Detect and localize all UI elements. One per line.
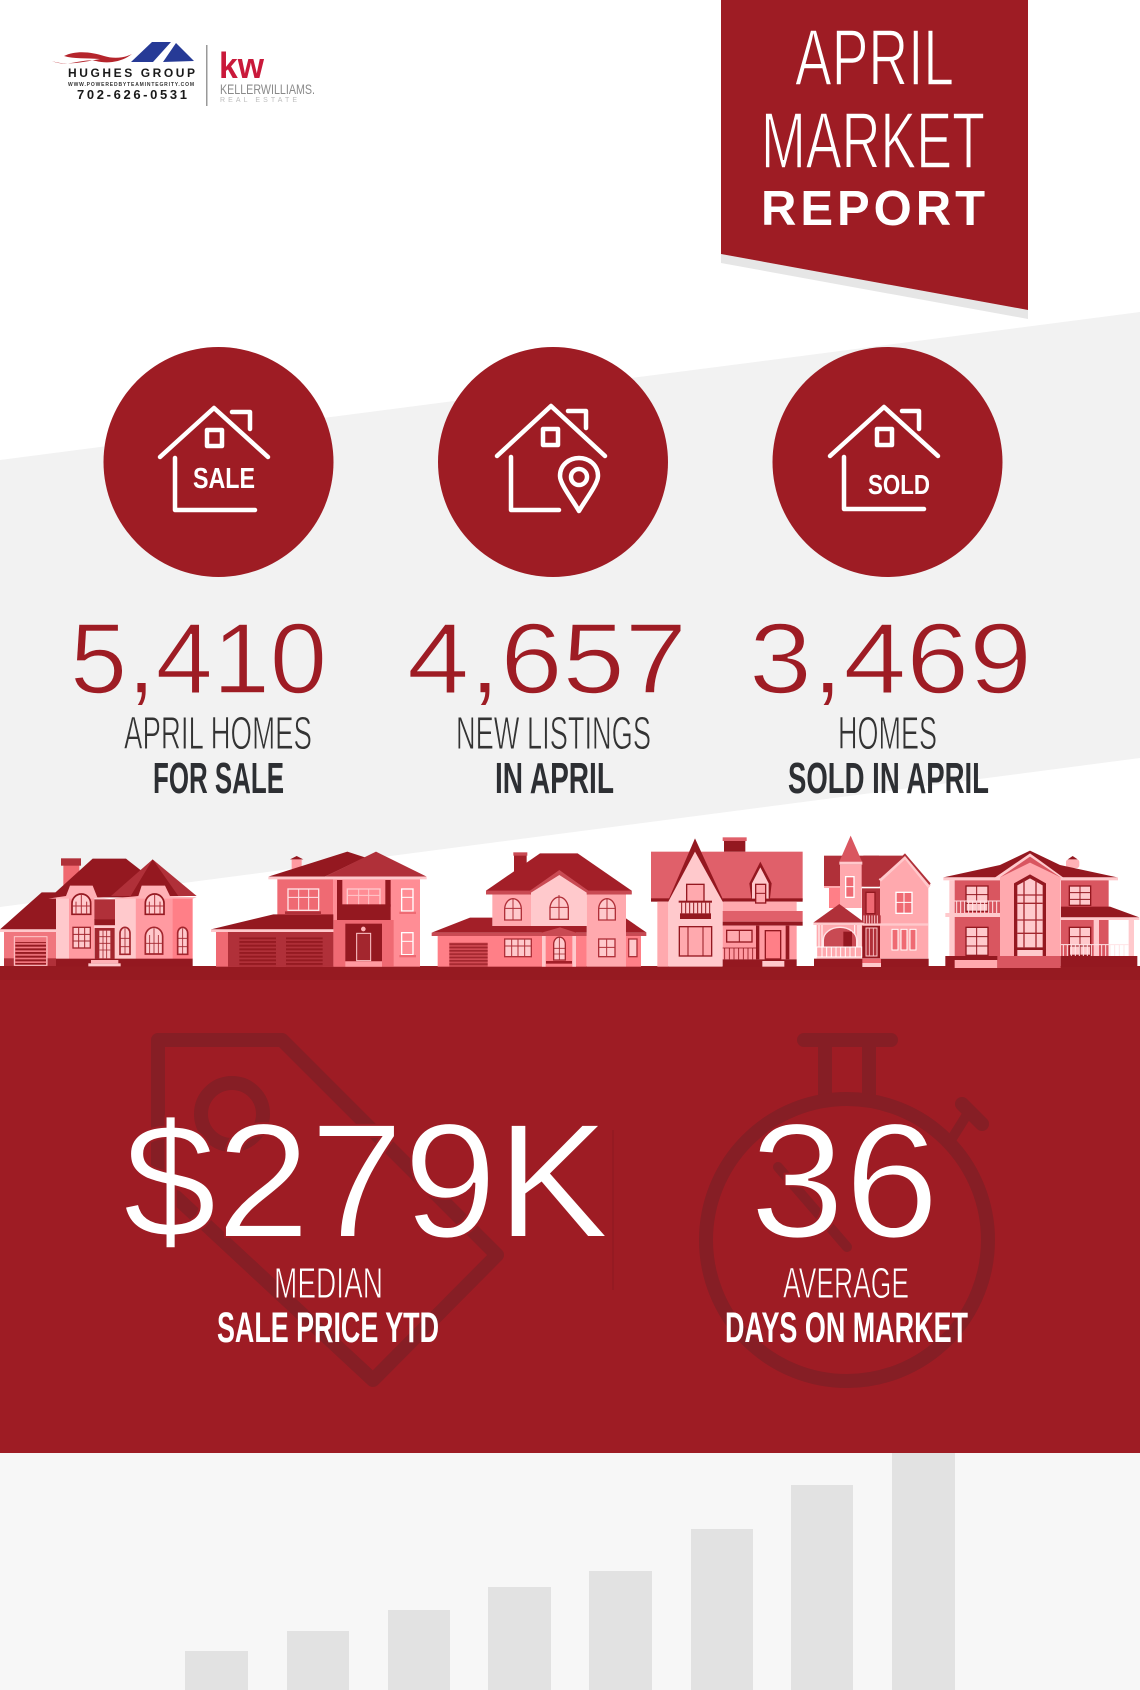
- illustration: house 5: [813, 836, 931, 967]
- logo: real estate: REAL ESTATE: [220, 97, 297, 104]
- logo: company name: HUGHES GROUP: [68, 66, 195, 80]
- watermark icon: price tag: [158, 1040, 497, 1380]
- label light: AVERAGE: [783, 1259, 909, 1308]
- background: diagonal grey band: [0, 312, 1140, 907]
- panel: red statistics block: [0, 966, 1140, 1454]
- logo: blue roof: [131, 42, 171, 62]
- stat: new listings: [407, 347, 687, 803]
- logo: Keller Williams wordmark: KELLERWILLIAMS.: [220, 82, 315, 97]
- bar chart: [185, 1453, 955, 1690]
- stat: average days on market: [725, 1089, 968, 1352]
- logo: Hughes Group and Keller Williams: [52, 42, 315, 106]
- banner title: April: APRIL: [795, 13, 954, 102]
- watermark icon: stopwatch: [706, 1040, 988, 1381]
- label bold: SALE PRICE YTD: [217, 1304, 439, 1352]
- stat: homes sold: [749, 347, 1032, 803]
- label light: NEW LISTINGS: [456, 707, 651, 759]
- label bold: SOLD IN APRIL: [788, 754, 989, 803]
- stat: median sale price: [123, 1089, 609, 1352]
- logo: divider: [206, 45, 208, 106]
- label bold: DAYS ON MARKET: [725, 1304, 968, 1352]
- circle badge: [772, 347, 1002, 577]
- banner shadow: [721, 254, 1028, 319]
- label light: HOMES: [838, 707, 937, 759]
- label light: MEDIAN: [274, 1259, 383, 1308]
- illustration: house 1: [0, 858, 197, 966]
- value: 4,657: [407, 603, 687, 715]
- icon: house with SOLD label: [830, 407, 938, 509]
- value: 5,410: [70, 603, 327, 715]
- logo: red swoosh: [52, 52, 132, 64]
- logo: phone number: 702-626-0531: [77, 87, 187, 102]
- banner title: Market: MARKET: [761, 96, 985, 185]
- label bold: FOR SALE: [153, 754, 284, 803]
- icon: house with SALE label: [160, 408, 268, 510]
- icon: house with SALE label: SALE: [193, 463, 255, 495]
- logo: website: WWW.POWEREDBYTEAMINTEGRITY.COM: [68, 82, 194, 88]
- logo: blue roof right: [163, 43, 194, 62]
- value: $279K: [123, 1089, 609, 1272]
- banner title: Report: REPORT: [761, 182, 985, 236]
- label bold: IN APRIL: [495, 754, 614, 803]
- illustration: house 3: [432, 852, 647, 967]
- circle badge: [104, 347, 334, 577]
- value: 3,469: [749, 603, 1032, 715]
- label light: APRIL HOMES: [124, 707, 312, 759]
- panel: bar chart background: [0, 1453, 1140, 1690]
- illustration: house 2: [211, 852, 427, 967]
- value: 36: [750, 1089, 939, 1272]
- icon: house with SOLD label: SOLD: [868, 469, 930, 500]
- illustration: house 4: [651, 837, 803, 967]
- divider line: [612, 1130, 614, 1290]
- icon: house with location pin: [497, 406, 605, 511]
- stat: homes for sale: [70, 347, 334, 803]
- illustration: house 6: [943, 851, 1139, 968]
- banner: April Market Report: [721, 0, 1028, 319]
- circle badge: [438, 347, 668, 577]
- banner body: [721, 0, 1028, 310]
- logo: kw mark: kw: [219, 45, 265, 86]
